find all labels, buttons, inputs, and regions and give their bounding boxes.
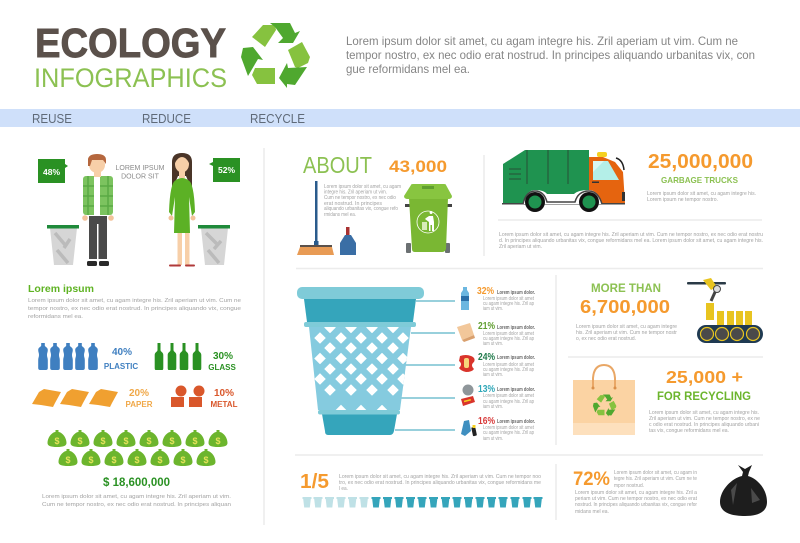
text block: trucks long: Lorem ipsum dolor sit amet, cu agam integre his. Zril aperiam ut vim. Cum ne tempor nostro, ex nec odio erat nostru (499, 232, 763, 238)
chart: money bags: $ (123, 436, 129, 446)
text block: 72%: periam ut vim. Cum ne tempor nostro, ex nec odio erat (575, 496, 697, 502)
text block: about: erat nostrud. In principes (324, 201, 382, 207)
icon: left bin (47, 225, 79, 265)
row: 24%: iam ut vim. (483, 372, 503, 378)
text block: one fifth: tro, ex nec odio erat nostrud. In principes aliquando urbanitas vix, congue reformidans me (339, 480, 541, 486)
text block: more than (576, 324, 677, 342)
chart: metal: METAL (211, 400, 238, 409)
text block: about: rmidans mel ea. (324, 212, 356, 218)
chart: money bags: $ (54, 436, 60, 446)
label: lorem ipsum dolor sit: LOREM IPSUM (115, 165, 165, 172)
chart: money bags: $ (65, 455, 71, 465)
title: ECOLOGY (35, 20, 226, 66)
row: 21%: 21% (478, 321, 495, 332)
chart: money bags (48, 430, 228, 466)
figure: 72%: 72% (573, 469, 610, 490)
chart: paper: PAPER (126, 400, 153, 409)
figure: 25,000,000: 25,000,000 (648, 151, 753, 173)
text block: one fifth (339, 474, 541, 492)
text block: more than: Lorem ipsum dolor sit amet, cu agam integre (576, 324, 677, 330)
label: lorem ipsum dolor sit (115, 165, 165, 180)
text block: trucks long: Zril aperiam ut vim. (499, 244, 542, 250)
label: lorem ipsum dolor sit: DOLOR SIT (121, 174, 160, 180)
figure: 6,700,000: 6,700,000 (580, 296, 670, 317)
row: 32%: iam ut vim. (483, 306, 503, 312)
row: 21% (457, 321, 535, 347)
label: more than: MORE THAN (591, 281, 661, 295)
chart: plastic: 40% (112, 347, 132, 358)
row: 24%: Lorem ipsum dolor. (497, 355, 535, 361)
title (34, 20, 227, 93)
chart: money bags: $ (100, 436, 106, 446)
text block: 72%: Lorem ipsum dolor sit amet, cu agam integre his. Zril a (575, 490, 698, 496)
text block: more than: his. Zril aperiam ut vim. Cum ne tempor nostr (576, 330, 677, 336)
chart: plastic (38, 343, 138, 371)
icon: broom (297, 181, 334, 255)
chart: money bags: $ (215, 436, 221, 446)
text block: amount description: Lorem ipsum dolor sit amet, cu agam integre his. Zril aperiam ut vim. (42, 494, 231, 500)
row: 24%: Lorem ipsum dolor sit amet (483, 362, 534, 368)
text block: about: integre his. Zril aperiam ut vim. (324, 190, 387, 196)
icon: garbage truck (502, 150, 625, 212)
row: 13%: iam ut vim. (483, 404, 503, 410)
chart: money bags: $ (157, 455, 163, 465)
text block: about: Lorem ipsum dolor sit amet, cu agam (324, 184, 401, 190)
text block: 72%: tegre his. Zril aperiam ut vim. Cum ne te (614, 476, 697, 482)
row: 21%: Lorem ipsum dolor. (497, 325, 535, 331)
row: 13%: 13% (478, 384, 495, 395)
text block: for recycling: c odio erat nostrud. In principes aliquando urbani (649, 422, 759, 428)
text block: lorem ipsum (28, 298, 241, 320)
text block: 72% (575, 470, 698, 515)
chart: money bags: $ (134, 455, 140, 465)
icon: basket (297, 287, 424, 435)
total amount: $ 18,600,000 (103, 475, 170, 489)
label: garbage trucks: GARBAGE TRUCKS (661, 175, 738, 185)
row: 32%: Lorem ipsum dolor sit amet (483, 296, 534, 302)
text block: lorem ipsum: tempor nostro, ex nec odio erat nostrud. In principes aliquando vix, congue (28, 306, 241, 312)
row: 21%: Lorem ipsum dolor sit amet (483, 331, 534, 337)
badge: 52% (209, 158, 240, 182)
text block: 72%: nostrud. In principes aliquando urbanitas vix, congue refor (575, 502, 697, 508)
figure: woman (168, 153, 196, 266)
badge: 48% (38, 159, 68, 183)
row: 13%: Lorem ipsum dolor sit amet (483, 393, 534, 399)
text block: amount description (42, 494, 231, 508)
row: 16%: cu agam integre his. Zril ap (483, 430, 534, 436)
navigation band: REDUCE (142, 111, 191, 126)
badge: 48%: 48% (43, 167, 60, 177)
row: 21%: cu agam integre his. Zril ap (483, 336, 534, 342)
text block: for recycling (649, 410, 760, 434)
text block: 72%: Lorem ipsum dolor sit amet, cu agam in (614, 470, 697, 476)
figure: 43,000: 43,000 (389, 157, 447, 176)
row: 32%: cu agam integre his. Zril ap (483, 301, 534, 307)
chart: glass: 30% (213, 351, 233, 362)
figure: 1/5: 1/5 (300, 471, 329, 493)
panel: one fifth (300, 471, 542, 508)
chart: paper (32, 388, 153, 409)
text block: amount description: Cum ne tempor nostro, ex nec odio erat nostrud. In principes aliquan (42, 502, 231, 508)
leader lines (395, 301, 455, 430)
chart: money bags: $ (169, 436, 175, 446)
text block: trucks short (647, 191, 756, 203)
text block: one fifth: l ea. (339, 486, 348, 492)
text block: 72%: mpor nostrud. (614, 483, 644, 489)
icon: black trash bag (720, 465, 767, 516)
text block: about: Cum ne tempor nostro, ex nec odio (324, 195, 396, 201)
panel: garbage trucks (499, 150, 763, 250)
row: 13% (461, 384, 535, 410)
text block: about: aliquando urbanitas vix, congue refo (324, 206, 398, 212)
text block: trucks short: Lorem ipsum ne tempor nostro. (647, 197, 718, 203)
chart: money bags: $ (88, 455, 94, 465)
row: 16%: Lorem ipsum dolor. (497, 419, 535, 425)
navigation band: RECYCLE (250, 111, 305, 126)
chart: money bags: $ (111, 455, 117, 465)
chart: glass: GLASS (208, 363, 236, 372)
icon: green wheelie bin (404, 184, 452, 253)
panel: more than 6,700,000 (576, 278, 763, 343)
text block: lorem ipsum: Lorem ipsum dolor sit amet, cu agam integre his. Zril aperiam ut vim. Cum ne (28, 298, 241, 304)
text block: trucks long: d. In principes aliquando urbanitas vix, congue reformidans mel ea. Lorem ipsum dolor sit amet, cu agam integre his. (499, 238, 763, 244)
chart: paper: 20% (129, 388, 149, 399)
intro text: tempor nostro, ex nec odio erat nostrud. In principes aliquando urbanitas vix, con (346, 48, 755, 62)
row: 13%: cu agam integre his. Zril ap (483, 399, 534, 405)
chart: money bags: $ (77, 436, 83, 446)
row: 32%: Lorem ipsum dolor. (497, 290, 535, 296)
row: 16%: 16% (478, 416, 495, 427)
row: 24%: cu agam integre his. Zril ap (483, 367, 534, 373)
figure: man (82, 154, 114, 266)
chart: metal (171, 386, 238, 409)
intro text: gue reformidans mel ea. (346, 62, 470, 76)
panel: 72% (573, 465, 767, 516)
chart: money bags: $ (146, 436, 152, 446)
row: 16% (461, 416, 535, 442)
text block: more than: o, ex nec odio erat nostrud. (576, 336, 636, 342)
row: 24% (459, 352, 535, 378)
row: 32%: 32% (477, 286, 494, 297)
row: 13%: Lorem ipsum dolor. (497, 387, 535, 393)
text block: for recycling: Lorem ipsum dolor sit amet, cu agam integre his. (649, 410, 759, 416)
text block: 72%: midans mel ea. (575, 509, 609, 515)
row: 16%: Lorem ipsum dolor sit amet (483, 425, 534, 431)
row: 21%: iam ut vim. (483, 341, 503, 347)
chart: metal: 10% (214, 388, 234, 399)
text block: trucks long (499, 232, 763, 250)
intro text: Lorem ipsum dolor sit amet, cu agam integre his. Zril aperiam ut vim. Cum ne (346, 34, 738, 48)
navigation band: REUSE (32, 111, 72, 126)
chart: waste basket breakdown (297, 286, 535, 442)
chart: plastic: PLASTIC (104, 362, 138, 371)
text block: about (324, 184, 401, 218)
chart: money bags: $ (203, 455, 209, 465)
title: INFOGRAPHICS (34, 63, 227, 93)
text block: lorem ipsum: reformidans mel ea. (28, 314, 83, 320)
panel: for recycling (573, 365, 760, 435)
text block: for recycling: Zril aperiam ut vim. Cum ne tempor nostro, ex ne (649, 416, 760, 422)
navigation band (0, 109, 800, 127)
icon: robot arm and conveyor (687, 278, 763, 343)
chart: money bags: $ (192, 436, 198, 446)
chart: money bags: $ (180, 455, 186, 465)
text block: for recycling: tas vix, congue reformidans mel ea. (649, 428, 729, 434)
panel: people and bins (38, 153, 240, 266)
icon: recycle symbol (241, 23, 310, 88)
text block: trucks short: Lorem ipsum dolor sit amet, cu agam integre his. (647, 191, 756, 197)
icon: right bin (198, 225, 230, 265)
chart: cups (302, 497, 542, 508)
row: 16%: iam ut vim. (483, 436, 503, 442)
panel: about (297, 152, 452, 255)
heading: about: ABOUT (303, 152, 372, 178)
label: for recycling: FOR RECYCLING (657, 389, 751, 403)
icon: paper bag (573, 365, 635, 435)
text block: one fifth: Lorem ipsum dolor sit amet, cu agam integre his. Zril aperiam ut vim. Cum ne tempor noo (339, 474, 541, 480)
chart: glass (155, 343, 236, 372)
badge: 52%: 52% (218, 165, 235, 175)
row: 32% (461, 286, 535, 312)
intro text (346, 34, 755, 76)
figure: 25,000 +: 25,000 + (666, 367, 743, 387)
icon: dustpan (340, 227, 356, 255)
heading: lorem ipsum: Lorem ipsum (28, 283, 94, 295)
row: 24%: 24% (478, 352, 495, 363)
